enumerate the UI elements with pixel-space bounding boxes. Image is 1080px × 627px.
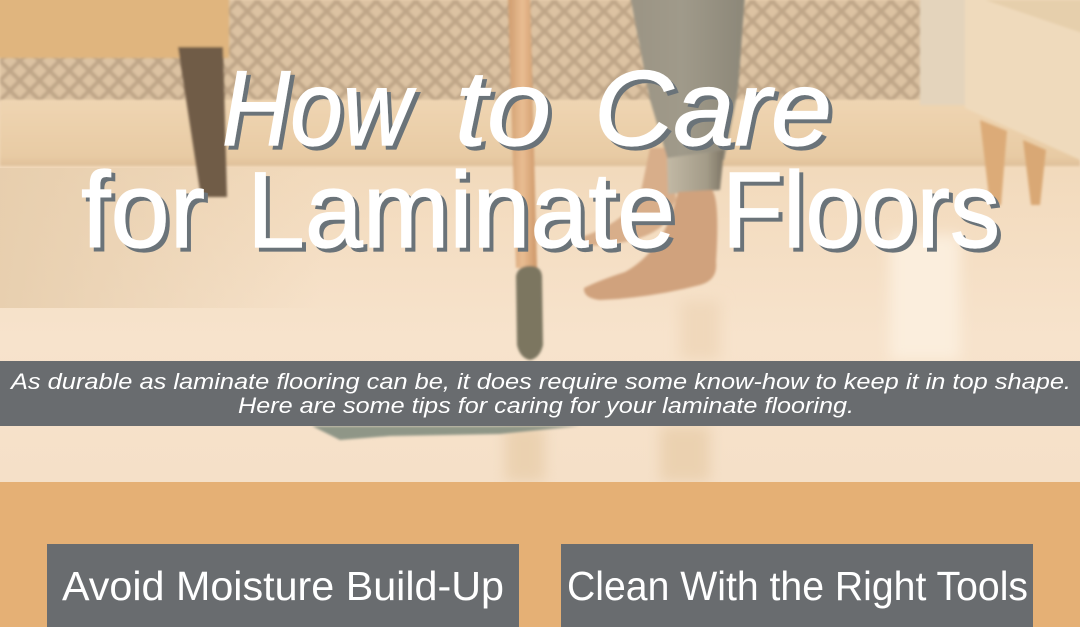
title word: Care: Care: [594, 48, 832, 168]
photo: armchair left: [0, 0, 229, 197]
front foot: [584, 190, 717, 300]
title word: Laminate: Laminate: [247, 149, 675, 270]
heading card: avoid moisture build-up: [47, 544, 519, 627]
photo: mop handle and head: [312, 0, 580, 440]
title word: to: to: [455, 48, 551, 168]
orange content panel: [0, 482, 1080, 627]
heading text: Clean With the Right Tools: [567, 563, 1028, 609]
jeans: [630, 0, 745, 160]
heading text: Avoid Moisture Build-Up: [62, 563, 504, 609]
hero photo background: [0, 0, 1080, 482]
title word: Floors: Floors: [722, 149, 1000, 270]
title word: for: for: [81, 149, 205, 270]
intro text line 1: As durable as laminate flooring can be, it does require some know-how to keep it in top shape.: [9, 369, 1071, 394]
intro text line 2: Here are some tips for caring for your laminate flooring.: [238, 393, 854, 418]
title: [81, 48, 1000, 270]
photo: person's legs and bare feet: [578, 0, 745, 300]
jeans cuff: [667, 150, 724, 194]
heading card: clean with the right tools: [561, 544, 1033, 627]
intro banner: [0, 361, 1080, 426]
title word: How: How: [222, 48, 417, 168]
back foot: [578, 148, 676, 246]
photo: sofa right: [920, 0, 1080, 205]
